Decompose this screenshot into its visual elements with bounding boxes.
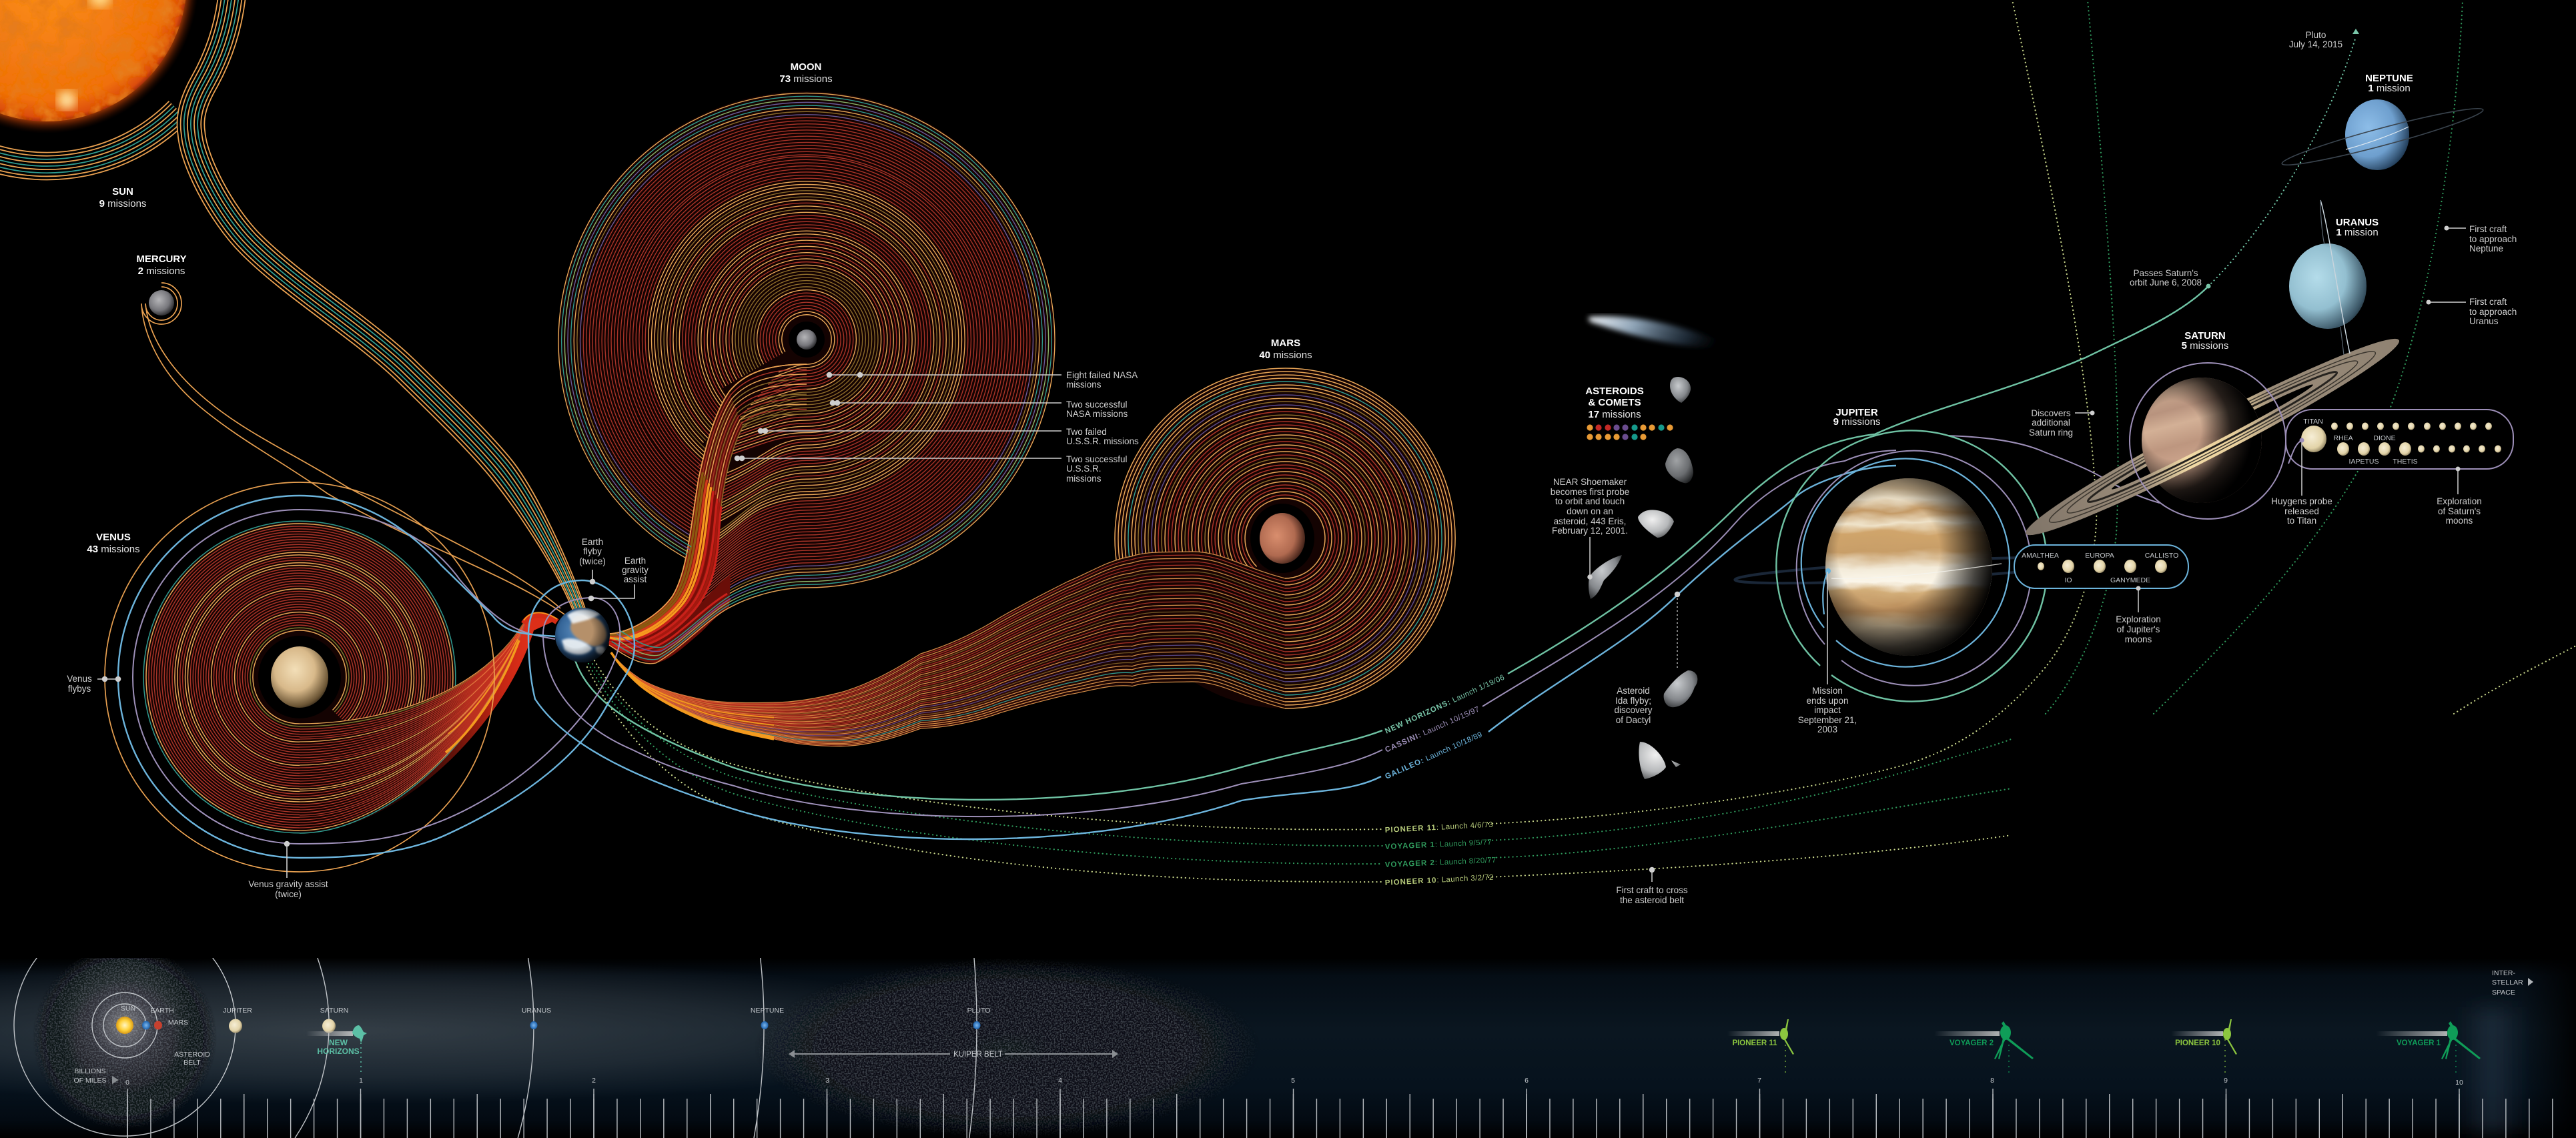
near shoemaker note: down on an (1567, 506, 1613, 516)
saturn (2026, 339, 2399, 535)
jupiter moons note: Exploration (2116, 614, 2161, 624)
neptune label: 1 mission (2368, 83, 2411, 94)
first craft uranus note (2426, 297, 2517, 326)
jupiter label: JUPITER (1835, 407, 1878, 418)
billions of miles arrow (112, 1076, 119, 1084)
saturn ring note: additional (2032, 418, 2070, 428)
asteroid belt noise (33, 945, 217, 1129)
asteroid callout lines (1588, 537, 1680, 882)
near shoemaker note: asteroid, 443 Eris, (1554, 516, 1626, 526)
earth gravity text: Earth (624, 556, 646, 566)
strip labels: ASTEROID (174, 1051, 210, 1059)
earth gravity text: gravity (622, 565, 649, 575)
impact note: September 21, (1798, 715, 1857, 725)
pluto arrival: July 14, 2015 (2289, 39, 2342, 49)
strip labels: OF MILES (73, 1077, 107, 1085)
ida note: discovery (1614, 705, 1653, 715)
venus label: VENUS (96, 532, 131, 543)
moon annotation text: Two failed (1066, 427, 1107, 437)
comet (1589, 316, 1735, 348)
voyager 2 label: VOYAGER 2: Launch 8/20/77 (1385, 857, 1496, 869)
ruler numbers: 6 (1525, 1077, 1529, 1085)
neptune (2280, 99, 2485, 172)
impact note: 2003 (1817, 724, 1837, 734)
interstellar space label (2492, 969, 2533, 997)
saturn moons box: THETIS (2393, 458, 2418, 466)
first craft neptune note: to approach (2469, 234, 2517, 244)
first craft neptune note: Neptune (2469, 243, 2503, 253)
sun label: 9 missions (99, 198, 146, 209)
strip labels: MARS (168, 1019, 188, 1027)
ruler numbers: 9 (2224, 1077, 2228, 1085)
saturn ring note: Discovers (2031, 408, 2071, 418)
moon annotation text: Two successful (1066, 454, 1128, 464)
strip labels: URANUS (522, 1007, 551, 1015)
cassini path (133, 436, 2160, 844)
moon spiral of 73 missions (558, 91, 1055, 643)
asteroids label: ASTEROIDS (1585, 386, 1644, 397)
near shoemaker note: to orbit and touch (1555, 496, 1625, 506)
venus globe (271, 646, 328, 708)
saturn moons box: RHEA (2333, 434, 2353, 442)
fan red glow near earth (611, 552, 1285, 746)
ruler numbers: 1 (359, 1077, 363, 1085)
uranus label: 1 mission (2336, 227, 2379, 238)
saturn moons note: moons (2446, 516, 2473, 526)
earth flyby text: (twice) (579, 556, 606, 566)
strip labels: EARTH (150, 1007, 174, 1015)
first craft neptune note (2445, 224, 2517, 253)
saturn rings front (2026, 340, 2399, 535)
near shoemaker note: February 12, 2001. (1552, 526, 1628, 536)
mars label: MARS (1271, 338, 1300, 349)
mission labels (1384, 674, 1506, 887)
venus gravity text: Venus gravity assist (248, 879, 328, 889)
moon globe (797, 330, 817, 350)
mars globe (1260, 513, 1305, 564)
first craft neptune note: First craft (2469, 224, 2507, 234)
moon to earth bundle (558, 93, 1055, 664)
ruler numbers: 7 (1757, 1077, 1761, 1085)
dotted pioneer and voyager paths (587, 0, 2576, 882)
new horizons path (575, 286, 2208, 800)
huygens note (2271, 438, 2332, 526)
pluto arrival (2289, 29, 2359, 49)
strip labels: PLUTO (967, 1007, 990, 1015)
mercury with orbits (141, 283, 564, 614)
saturn moons note (2437, 467, 2482, 526)
saturn moons note: Exploration (2437, 496, 2482, 506)
galileo label: GALILEO: Launch 10/18/89 (1384, 730, 1484, 781)
pioneer 11 label: PIONEER 11: Launch 4/6/73 (1385, 821, 1493, 834)
uranus label: URANUS (2336, 217, 2379, 228)
ruler numbers: 5 (1291, 1077, 1295, 1085)
saturn moons note: of Saturn's (2438, 506, 2481, 516)
ruler numbers: 3 (825, 1077, 829, 1085)
venus gravity text: (twice) (275, 889, 302, 899)
strip labels: SATURN (320, 1007, 348, 1015)
mercury label: 2 missions (138, 265, 185, 277)
strip labels: JUPITER (223, 1007, 252, 1015)
earth and venus callouts (97, 570, 634, 878)
asteroids (1589, 377, 1697, 779)
new horizons craft (306, 1025, 367, 1073)
venus flyby orbit orange (105, 0, 2576, 882)
sun label: SUN (112, 186, 133, 197)
saturn orbit note (2130, 268, 2211, 288)
earth flyby text: Earth (582, 537, 603, 547)
impact note (1798, 572, 1857, 734)
saturn orbit note: Passes Saturn's (2133, 268, 2198, 278)
asteroid mission dots (1587, 424, 1673, 440)
jupiter (1735, 431, 2095, 702)
jupiter moons box: AMALTHEA (2022, 552, 2059, 560)
saturn label: SATURN (2184, 330, 2226, 342)
jupiter moons box (2014, 545, 2188, 588)
jupiter moons note: of Jupiter's (2117, 624, 2160, 634)
interstellar space label: STELLAR (2492, 979, 2523, 987)
ruler numbers: 8 (1990, 1077, 1994, 1085)
moon label: 73 missions (779, 73, 833, 85)
saturn moons box: IAPETUS (2349, 458, 2379, 466)
saturn rings back (2017, 324, 2408, 550)
pioneer 10 craft: PIONEER 10 (2175, 1039, 2220, 1047)
planet orbits (14, 958, 977, 1138)
ruler numbers: 2 (592, 1077, 596, 1085)
jupiter moons note (2116, 586, 2161, 644)
mars label: 40 missions (1259, 350, 1312, 361)
pioneer 11 craft: PIONEER 11 (1732, 1039, 1777, 1047)
jupiter moons box: CALLISTO (2145, 552, 2178, 560)
earth gravity text: assist (624, 574, 647, 584)
saturn moons box: TITAN (2303, 418, 2323, 426)
voyager 1 craft (2376, 1021, 2481, 1073)
moon annotation text: U.S.S.R. missions (1066, 436, 1139, 446)
saturn ring note: Saturn ring (2029, 428, 2073, 438)
near shoemaker note: NEAR Shoemaker (1553, 477, 1627, 487)
saturn label: 5 missions (2182, 340, 2228, 352)
neptune label: NEPTUNE (2365, 73, 2413, 84)
ruler numbers: 4 (1058, 1077, 1062, 1085)
ida note: Ida flyby; (1615, 696, 1651, 706)
sun with mission rings (0, 0, 586, 610)
moon annotation text: U.S.S.R. (1066, 464, 1102, 474)
strip labels: BILLIONS (74, 1067, 106, 1075)
galileo path (118, 466, 1896, 858)
earth flyby text: flyby (583, 546, 602, 556)
impact note: Mission (1812, 686, 1843, 696)
near shoemaker note: becomes first probe (1551, 487, 1629, 497)
uranus (2289, 200, 2367, 355)
voyager 1 craft: VOYAGER 1 (2397, 1039, 2441, 1047)
first craft uranus note: to approach (2469, 307, 2517, 317)
distance ruler ticks (127, 1113, 2555, 1118)
moon annotation text: Eight failed NASA (1066, 370, 1138, 380)
saturn moons box (2286, 410, 2513, 469)
jupiter label: 9 missions (1833, 416, 1880, 428)
pioneer 10 label: PIONEER 10: Launch 3/2/72 (1385, 873, 1494, 887)
new horizons label: NEW HORIZONS: Launch 1/19/06 (1384, 674, 1506, 736)
moon label: MOON (791, 61, 821, 73)
kuiper belt arrow (789, 1050, 1118, 1059)
strip labels: BELT (183, 1059, 201, 1067)
mercury label: MERCURY (136, 253, 187, 265)
huygens note: Huygens probe (2271, 496, 2332, 506)
bottom distance strip (0, 945, 2576, 1138)
strip labels: NEPTUNE (751, 1007, 784, 1015)
saturn moons box: DIONE (2373, 434, 2396, 442)
jupiter moons note: moons (2125, 634, 2152, 644)
pioneer 11 craft (1727, 1019, 1794, 1073)
pioneer 10 craft (2171, 1019, 2237, 1073)
strip labels: SUN (121, 1005, 135, 1013)
jupiter orbits (1776, 431, 2047, 702)
kuiper belt noise (754, 958, 1261, 1138)
earth globe (555, 608, 610, 662)
first craft uranus note: Uranus (2469, 316, 2499, 326)
asteroids label: 17 missions (1588, 409, 1641, 420)
voyager 1 label: VOYAGER 1: Launch 9/5/77 (1385, 838, 1492, 851)
first craft uranus note: First craft (2469, 297, 2507, 307)
impact note: ends upon (1806, 696, 1849, 706)
interstellar space label: SPACE (2492, 989, 2515, 997)
pluto arrival: Pluto (2306, 30, 2326, 40)
ida note: Asteroid (1617, 686, 1650, 696)
moon annotation text: missions (1066, 474, 1102, 484)
saturn orbit note: orbit June 6, 2008 (2130, 277, 2202, 288)
ruler numbers: 10 (2455, 1079, 2463, 1087)
saturn ring note (2029, 408, 2095, 438)
ida note: of Dactyl (1616, 715, 1651, 725)
jupiter moons box: GANYMEDE (2110, 576, 2150, 584)
mars spiral of 40 missions (611, 368, 1455, 832)
interstellar space label: INTER- (2492, 969, 2515, 977)
ruler numbers: 0 (125, 1079, 129, 1087)
moon callouts (735, 372, 1061, 460)
cassini label: CASSINI: Launch 10/15/97 (1384, 705, 1481, 754)
strip planets (116, 1017, 981, 1034)
venus label: 43 missions (87, 544, 140, 555)
impact note: impact (1814, 705, 1841, 715)
venus spiral of 43 missions (143, 521, 557, 833)
voyager 2 craft (1934, 1021, 2034, 1073)
voyager 2 craft: VOYAGER 2 (1950, 1039, 1994, 1047)
moon annotation text: NASA missions (1066, 409, 1128, 419)
fan red glow near earth (300, 613, 556, 833)
jupiter moons box: IO (2064, 576, 2072, 584)
huygens note: released (2284, 506, 2319, 516)
venus flybys text: flybys (68, 684, 91, 694)
kuiper belt arrow: KUIPER BELT (953, 1051, 1003, 1059)
jupiter moons box: EUROPA (2085, 552, 2114, 560)
first craft note: First craft to cross (1616, 885, 1688, 895)
new horizons craft: HORIZONS (317, 1047, 360, 1056)
first craft note: the asteroid belt (1620, 895, 1684, 905)
new horizons craft: NEW (329, 1038, 348, 1047)
huygens note: to Titan (2287, 516, 2316, 526)
mars fan (611, 552, 1285, 746)
moon annotation text: missions (1066, 380, 1102, 390)
moon annotation text: Two successful (1066, 400, 1128, 410)
venus fan (300, 613, 556, 833)
asteroids label: & COMETS (1588, 397, 1641, 408)
venus flybys text: Venus (67, 674, 92, 684)
